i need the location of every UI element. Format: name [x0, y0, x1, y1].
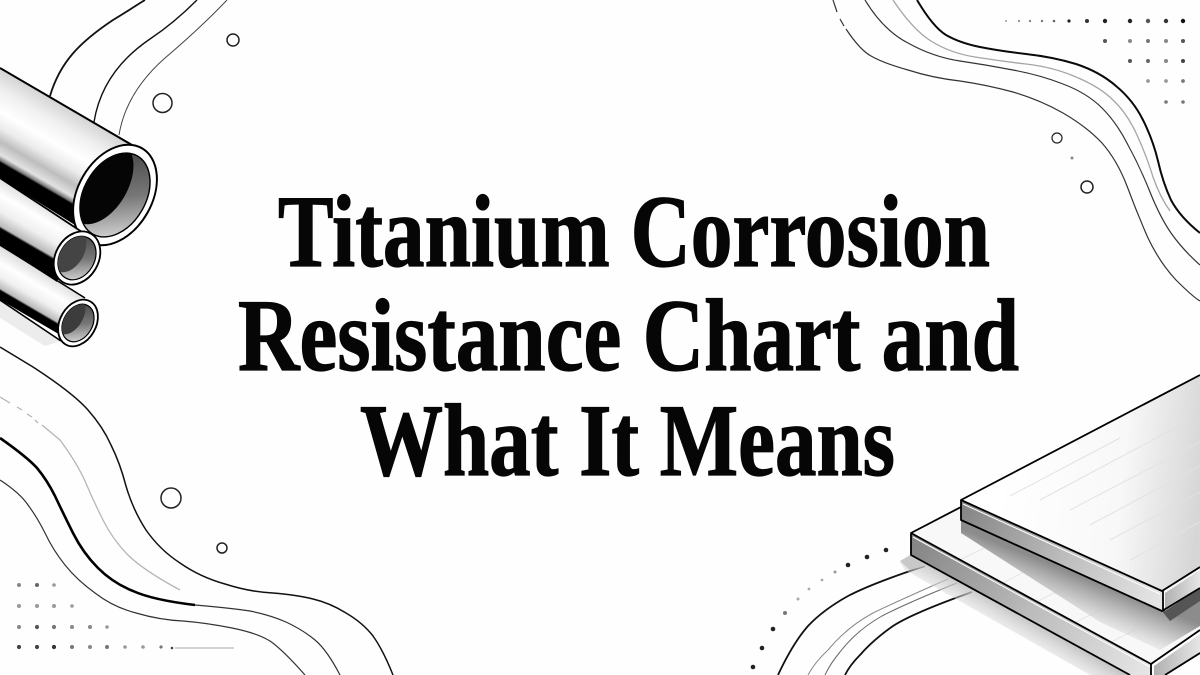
dot arc: bottom right — [751, 548, 888, 669]
dot grid: top right — [1005, 19, 1185, 104]
large pipe — [0, 67, 158, 246]
icon: titanium pipes — [0, 67, 158, 348]
upper plate — [961, 375, 1200, 611]
icon: titanium plates — [900, 375, 1200, 675]
dark corner shadow — [1162, 588, 1200, 621]
dot grid: bottom left — [17, 583, 173, 649]
title line 2: Resistance Chart and — [238, 279, 1019, 393]
wave lines: bottom right — [778, 566, 972, 675]
cast shadow on lower plate — [961, 520, 1200, 650]
title line 1: Titanium Corrosion — [278, 175, 990, 289]
medium pipe — [0, 178, 102, 286]
title — [238, 175, 1019, 498]
wave lines: top left — [50, 0, 227, 135]
small bottom pipe — [0, 245, 99, 348]
floating ring circles — [153, 34, 1093, 553]
lower plate — [911, 420, 1200, 675]
wave lines: top right — [833, 0, 1200, 301]
title line 3: What It Means — [360, 384, 895, 498]
shadow under lower plate — [900, 554, 1130, 675]
wave lines: bottom left — [0, 347, 393, 675]
